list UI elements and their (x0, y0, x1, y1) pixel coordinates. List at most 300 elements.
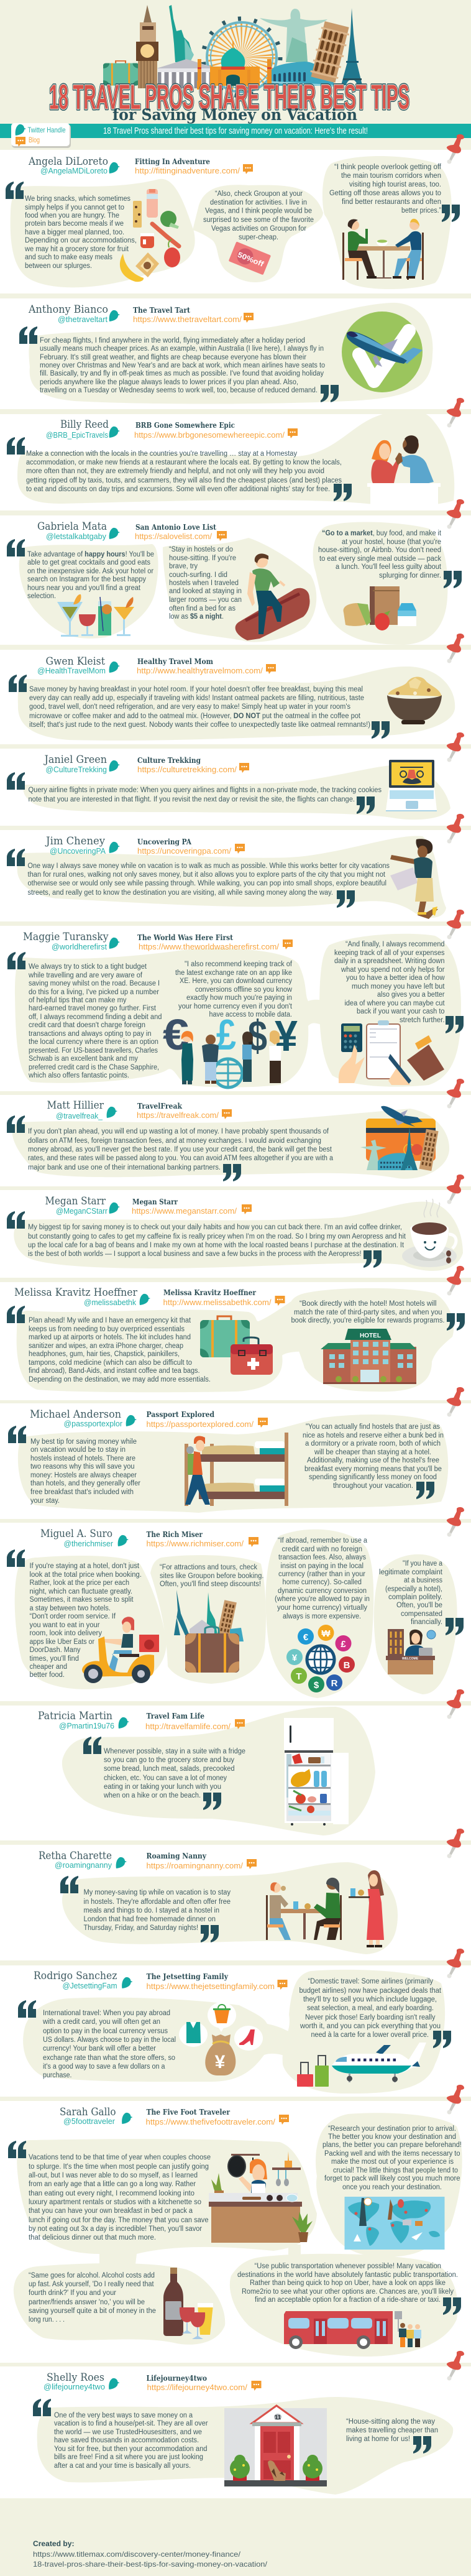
illustration: hotel receptionist: WELCOME (402, 1657, 419, 1661)
author name and handle (37, 655, 120, 675)
illustration: credit card and landmarks (360, 1106, 439, 1171)
illustration: currencies and travellers: € (163, 1010, 189, 1059)
speech blobs (17, 1288, 454, 1392)
quote text left: My best tip for saving money while (30, 1438, 137, 1446)
quote text right: “I think people overlook getting off (334, 164, 442, 171)
quote text column 3: currency (rather than in your (278, 1571, 365, 1578)
subtitle: for Saving Money on Vacation (112, 106, 357, 124)
quote text: travelling on a Tuesday or Wednesday seems to work well, too, because of reduced demand. (40, 387, 318, 394)
quote text column 3: (where you're allowed to pay in (275, 1595, 370, 1603)
author name and handle: Shelly Roes (47, 2371, 104, 2384)
illustration: currency bubbles around globe: € (303, 1632, 309, 1643)
quote text left: two reasons why this will save you (30, 1463, 134, 1470)
quote text main: than eating out every night, I recommend looking into (29, 2190, 194, 2197)
pin (447, 1829, 464, 1858)
quote text: fill. Basically, try and fly in off-peak times as much as possible. I've found that avoiding holiday (40, 370, 324, 377)
quote text left: option to pay in the local currency versus (43, 2028, 168, 2035)
quote text column 4: legitimate complaint (379, 1569, 443, 1576)
author name and handle (34, 1970, 133, 1990)
quote text left: your stay. (30, 1497, 60, 1505)
pin (447, 1387, 464, 1416)
icon: open quote (19, 326, 37, 344)
author name and handle: Gwen Kleist (46, 655, 105, 668)
author name and handle (60, 2106, 133, 2126)
icon: close quote (446, 1618, 464, 1635)
blog title and url (147, 1530, 258, 1548)
icon: open quote (60, 1876, 78, 1893)
icon: open quote (7, 849, 25, 866)
illustration: coupon (229, 241, 271, 275)
illustration: hotel receptionist (386, 1629, 436, 1674)
quote text: up the local cafe for a bag of beans and I make my own at home with the local roasted beans I purchase at the destination. It (28, 1242, 405, 1249)
quote text: Save money by having breakfast in your hotel room. If your hotel doesn't offer free breakfast, buying this meal (29, 686, 363, 693)
quote text top right: Packing well and with the items necessary to (324, 2150, 460, 2158)
icon: open quote (8, 1426, 26, 1443)
quote text column 2 (160, 1564, 263, 1588)
icon: close quote (337, 890, 355, 908)
panel: Melissa Kravitz Hoeffner (7, 1286, 465, 1416)
pin (447, 1266, 464, 1296)
quote text left: hours near you and you'll find a great (27, 584, 141, 592)
quote text left: between our splurges. (25, 262, 92, 270)
speech blob (18, 1415, 448, 1513)
quote text left: credit card that doesn't charge foreign (29, 1022, 145, 1029)
quote text left: We always try to stick to a tight budget (29, 963, 147, 971)
quote text left (29, 1317, 211, 1383)
blog title and url: https://uncoveringpa.com/ (137, 846, 231, 856)
quote text column 1: you want to eat in your (30, 1622, 100, 1629)
quote text middle: exactly how much you're paying in (186, 994, 292, 1002)
speech blob (17, 836, 446, 918)
illustration: snacks (120, 189, 180, 282)
illustration: cocktails (57, 594, 134, 637)
icon: close quote (321, 385, 339, 402)
quote text: is the best of both worlds — I support a local business and save a few bucks in the process with the Aeropress! (28, 1250, 362, 1258)
quote text column 4: complain politely. (388, 1594, 442, 1601)
quote text right: they'll try to sell you which include luggage, (303, 1996, 437, 2003)
quote text lower left: up fast. Ask yourself, 'Do I really need that (29, 2281, 154, 2288)
quote text middle (169, 546, 242, 621)
author name and handle: Jim Cheney (45, 835, 105, 847)
quote text column 4: (especially a hotel), (385, 1586, 442, 1593)
author name and handle: @melissabethk (84, 1298, 136, 1307)
quote text left: food when you are hungry. The (25, 212, 119, 219)
author name and handle (47, 1099, 117, 1120)
blog title and url (133, 306, 254, 324)
panel: Patricia Martin (38, 1707, 464, 1858)
icon: close quote (444, 571, 462, 588)
quote text: good, travel well, don't need refrigeration, and are very easy to make! Simply heat up water in your room's (29, 703, 350, 711)
quote text column 1: cheaper and (30, 1663, 67, 1671)
quote text right: “And finally, I always recommend (345, 941, 445, 948)
quote text column 4: Often, you'll be (396, 1602, 442, 1609)
quote text lower right: Rome2rio to see what your other options are. Chances are, you'll likely (242, 2288, 454, 2296)
author name and handle: @AngelaMDiLoreto (40, 166, 107, 175)
quote text middle: have access to mobile data. (209, 1011, 292, 1018)
blog title and url: TravelFreak (137, 1102, 183, 1110)
speech blobs (23, 1970, 445, 2094)
quote text lower right: Rather than being quick to hop on Uber, have a look on apps like (250, 2279, 446, 2287)
author name and handle (28, 155, 120, 175)
quote text right: house-sitting), or Airbnb. You don't need (318, 547, 441, 554)
quote text right: “Book directly with the hotel! Most hotels will (300, 1300, 436, 1308)
panel: Gwen Kleist (9, 655, 464, 762)
quote text: Query airline flights in private mode: When you query airlines and flights in a non-private mode, the tracking cookies (29, 787, 382, 794)
quote text left: free breakfast that's included with (30, 1489, 134, 1496)
quote text left: find abroad), Band-Aids, and instant coffee and tea bags. (29, 1367, 200, 1375)
quote text left: marked up at airports or hotels. The kit includes hand (29, 1334, 191, 1341)
quote text left: exchange rate than what the store offers, so (43, 2054, 175, 2062)
blog title and url (137, 838, 245, 856)
page background (0, 0, 471, 150)
author name and handle: Megan Starr (45, 1195, 106, 1207)
quote text lower right: “Use public transportation whenever possible! Many vacation (255, 2263, 441, 2270)
blog title and url: Lifejourney4two (147, 2374, 207, 2383)
quote text right (300, 1978, 442, 2039)
quote text middle: and looked at staying in (169, 588, 242, 595)
quote text: periods anywhere like the plague always leads to lower prices if you plan ahead. Also, (40, 379, 298, 386)
panel: Jim Cheney (7, 835, 464, 939)
quote text column 4 (379, 1560, 443, 1626)
quote text left (42, 2010, 176, 2079)
quote text left: preferred credit card is the Chase Sapphire, (29, 1064, 159, 1071)
quote text lower right: destinations in the world have absolutely fantastic public transportation. (237, 2271, 458, 2279)
author name and handle (46, 418, 120, 440)
speech blob (12, 1109, 449, 1179)
blog title and url: Melissa Kravitz Hoeffner (163, 1288, 257, 1297)
quote text column 1: “Don't order room service. If (30, 1613, 116, 1620)
speech blobs (15, 1530, 457, 1698)
blog title and url: https://culturetrekking.com/ (137, 765, 237, 774)
author name and handle: @HealthTravelMom (37, 666, 106, 675)
author name and handle: Retha Charette (39, 1850, 112, 1862)
blog title and url: Fitting In Adventure (135, 157, 210, 166)
pin (447, 1689, 464, 1719)
author name and handle: @CultureTrekking (46, 765, 107, 774)
icon: close quote (203, 1793, 221, 1810)
quote text left: of helpful tips that can make my (29, 997, 127, 1004)
blog title and url: https://www.theworldwasherefirst.com/ (139, 942, 279, 951)
quote text left: Depending on our accommodations, (25, 237, 137, 244)
quote text right: worth it, and you can pick everything that you (300, 2023, 441, 2030)
blog title and url: https://salovelist.com/ (135, 532, 212, 541)
quote text column 1: DoorDash. Many (30, 1646, 81, 1654)
author name and handle (37, 520, 120, 541)
quote text right: living at home for us! (346, 2435, 410, 2443)
blog title and url: https://travelfreak.com/ (137, 1110, 219, 1120)
blog title and url: Passport Explored (147, 1410, 215, 1419)
icon: close quote (357, 796, 375, 814)
quote text: chicken, etc. You can save a lot of money (104, 1775, 227, 1782)
quote text right (318, 530, 442, 579)
quote text column 3: transaction fees. Also, always (278, 1554, 366, 1561)
illustration: currencies and travellers: ¥ (275, 1012, 298, 1060)
quote text middle: super-cheap. (239, 234, 278, 241)
quote text left: currency! Your bank will offer a better (43, 2045, 156, 2052)
blog title and url: Culture Trekking (137, 756, 201, 765)
quote text left: selection. (27, 593, 56, 600)
illustration: walker with map (390, 839, 438, 919)
quote text middle: larger rooms — you can (169, 596, 242, 604)
quote text: My biggest tip for saving money is to check out your daily habits and how you can cut back there. I'm an avid coffee drinker, (28, 1224, 402, 1231)
quote text main (29, 2154, 211, 2241)
illustration: money bag with shopping bubbles (179, 2002, 263, 2075)
quote text left: saving money whilst on the road. Because I (29, 980, 160, 987)
quote text column 4: "If you have a (403, 1560, 443, 1567)
blog title and url (147, 2374, 261, 2392)
illustration: packed lunch (344, 586, 416, 630)
quote text: dollars on ATM fees, foreign transaction fees, and at money exchanges. I would avoid exchanging (28, 1137, 321, 1145)
author name and handle (14, 1286, 150, 1307)
author name and handle: Miguel A. Suro (40, 1528, 112, 1540)
quote text right: Never pick those! Early boarding isn't really (305, 2014, 436, 2021)
quote text left: tampons, cold medicine (which can also be difficult to (29, 1359, 192, 1367)
quote text (40, 337, 325, 394)
quote text right: seat selection, a meal, and early boarding. (307, 2005, 434, 2012)
quote text left: We bring snacks, which sometimes (25, 195, 130, 203)
author name and handle: Matt Hillier (47, 1099, 104, 1112)
illustration: world map (344, 2197, 445, 2250)
quote text main: Vacations tend to be that time of year when couples choose (29, 2154, 211, 2161)
icon: close quote (223, 1164, 241, 1181)
quote text column 3: “If abroad, remember to use a (278, 1537, 368, 1544)
blog title and url (145, 2108, 289, 2126)
quote text left: which also offers fantastic points. (28, 1072, 129, 1079)
pin (447, 634, 464, 663)
quote text right: better prices.” (401, 207, 441, 215)
quote text middle: your home currency even if you don't (178, 1003, 293, 1010)
quote text left: we may hit a grocery store for fruit (24, 246, 129, 253)
quote text left: the local currency where there is an option (29, 1038, 158, 1046)
blog title and url: https://roamingnanny.com/ (147, 1861, 243, 1870)
illustration: bunk bed and hiker (185, 1433, 288, 1506)
quote text right: to eat every single meal outside — pack (319, 555, 441, 563)
panel: Gabriela Mata (7, 520, 464, 663)
blog title and url (134, 421, 298, 440)
quote text lower right (237, 2263, 458, 2304)
illustration: currency bubbles around globe: $ (314, 1680, 319, 1691)
quote text column 1: better food. (30, 1671, 65, 1679)
illustration: couple dining (342, 219, 424, 280)
illustration: currency bubbles around globe: ¥ (292, 1653, 298, 1663)
quote text top right: “Research your destination prior to arrival. (328, 2125, 456, 2133)
blog title and url (163, 1288, 285, 1307)
quote text right: stretch further. (400, 1017, 445, 1024)
quote text: accommodation, or make new friends at a restaurant where the locals eat. By getting to know the locals, (26, 459, 342, 466)
quote text main: from an early age that a little can go a long way. Rather (29, 2181, 196, 2188)
panel: Billy Reed (7, 409, 464, 529)
blog title and url: Roaming Nanny (147, 1852, 207, 1860)
quote text left: on vacation would be to stay in (30, 1446, 126, 1454)
panel: Megan Starr (7, 1195, 464, 1296)
author name and handle: @MeganCStarr (56, 1206, 108, 1216)
pin (447, 910, 464, 939)
illustration: house door with dog: 11 (275, 2414, 281, 2421)
quote text (28, 1128, 334, 1171)
quote text left: vacation is to find a house/pet-sit. They are all over (54, 2420, 208, 2427)
quote text left: simply helps if you cannot get to (25, 204, 124, 211)
quote text right: breakfast every morning means that you'll be (304, 1466, 442, 1473)
author name and handle (23, 931, 120, 951)
quote text left: than hotels, and they generally offer (30, 1480, 140, 1487)
quote text: some bread, lunch meat, salads, precooked (104, 1765, 235, 1773)
quote text left: money: Hostels are always cheaper (30, 1472, 137, 1479)
author name and handle: @JetsettingFam (62, 1981, 117, 1990)
quote text right: need à la carte for a lower overall price. (311, 2031, 429, 2039)
quote text right: throughout your vacation. (333, 1482, 413, 1490)
quote text lower right: find an acceptable option for a fraction of a ride-share or taxi. (255, 2296, 441, 2304)
panel: Michael Anderson (8, 1408, 464, 1537)
illustration: currency bubbles around globe (286, 1625, 355, 1692)
quote text: to eat and discounts on day trips and excursions. Some will even offer additional nights' stay for free. (26, 486, 330, 493)
quote text main: luxury apartment rentals or studios with a kitchenette so (29, 2199, 201, 2206)
quote text middle: house-sitting. If you're (169, 555, 236, 562)
quote text middle: surprised to see some of the favorite (203, 216, 314, 224)
quote text: eating in or taking your lunch with you (104, 1783, 221, 1791)
author name and handle (30, 1408, 137, 1428)
author name and handle (38, 1710, 129, 1730)
icon: open quote (18, 2000, 36, 2018)
quote text middle: “Stay in hostels or do (169, 546, 233, 553)
quote text: If you don't plan ahead, you will end up wasting a lot of money. I have probably spent thousands of (28, 1128, 329, 1135)
quote text column 3: your home currency) virtually (277, 1604, 367, 1612)
quote text right: “Go to a market, buy food, and make it (322, 530, 442, 537)
icon: close quote (447, 1313, 465, 1331)
quote text top right: once you reach your destination. (342, 2184, 442, 2191)
speech blobs (14, 2113, 462, 2357)
quote text right: much money you have left but (352, 983, 445, 990)
quote text: more often than not, they are extremely friendly and helpful, and not only will they help you avoid (26, 468, 324, 475)
speech blob (17, 409, 454, 506)
quote text middle: Vegas, and I think people would be (205, 208, 312, 215)
illustration: plane over green check (342, 312, 423, 392)
quote text: otherwise see or would only see while passing through. While walking, you can pop into small shops, explore beautiful (27, 880, 386, 887)
author name and handle: @thetraveltart (58, 315, 107, 324)
quote text lower left: saving yourself quite a bit of money in the (29, 2307, 156, 2315)
quote text lower left (29, 2272, 156, 2324)
illustration: two people at counter (367, 435, 441, 506)
quote text right: a lunch. You'll feel less guilty about (336, 563, 442, 571)
footer credits: 18-travel-pros-share-their-best-tips-for-saving-money-on-vacation/ (33, 2560, 268, 2569)
quote text: itself; that's just rude to the next guest. Nobody wants their coffee to unexpectedly taste like oatmeal remnants!) (29, 721, 370, 729)
author name and handle (28, 303, 120, 324)
icon: open quote (7, 1115, 25, 1133)
blog title and url (137, 657, 276, 675)
quote text middle: brave, try (169, 563, 198, 570)
illustration: plane and luggage (297, 2043, 426, 2087)
blog title and url (135, 523, 227, 541)
author name and handle: Patricia Martin (38, 1710, 112, 1722)
quote text right: “Domestic travel: Some airlines (primarily (308, 1978, 433, 1985)
blog title and url: Healthy Travel Mom (137, 657, 213, 666)
pin (447, 814, 464, 843)
pin (447, 398, 464, 428)
quote text left: US dollars. Always choose to pay in the local (43, 2036, 176, 2044)
quote text right (334, 941, 445, 1024)
footer credits: Created by: (33, 2539, 75, 2548)
blog title and url: Uncovering PA (137, 838, 192, 846)
illustration: currencies and travellers: $ (248, 1012, 267, 1060)
blog title and url: The World Was Here First (137, 933, 233, 942)
speech blob (23, 765, 450, 819)
quote text left: with a credit card, you will often get an (42, 2018, 160, 2026)
author name and handle (39, 1850, 127, 1870)
quote text middle: Vegas activities on Groupon for (211, 225, 306, 233)
quote text: note that you are interested in that flight. If you revisit the next day or revisit the site, the flights can change. (29, 796, 355, 803)
quote text lower left: partner/friends answer 'no,' you will be (29, 2299, 145, 2306)
blog title and url (145, 1712, 245, 1731)
blog title and url: San Antonio Love List (135, 523, 216, 532)
quote text column 3: dynamic currency conversion (278, 1587, 367, 1595)
icon: open quote (33, 2399, 51, 2416)
quote text middle (203, 190, 314, 241)
illustration: oatmeal bowl (387, 676, 442, 724)
blog title and url: https://www.thetraveltart.com/ (133, 315, 242, 324)
blog title and url: https://lifejourney4two.com/ (147, 2383, 247, 2392)
quote text left: One of the very best ways to save money on a (54, 2412, 193, 2419)
speech blob (18, 667, 455, 741)
blog title and url: The Jetsetting Family (147, 1972, 229, 1981)
author name and handle: Billy Reed (60, 418, 109, 431)
quote text left: do this for a living, I've picked up a number (29, 989, 159, 996)
pin (447, 732, 464, 762)
author name and handle (45, 1195, 120, 1216)
quote text main: lunch if going out for the day. The money that you can save (29, 2217, 209, 2224)
quote text left: it's a good way to save a few dollars on a (43, 2063, 165, 2070)
quote text: London that had free homemade dinner on (83, 1916, 216, 1923)
icon: open quote (8, 2141, 26, 2158)
quote text right: "You can actually find hostels that are just as (306, 1423, 440, 1431)
quote text (26, 450, 342, 493)
speech blobs (15, 934, 461, 1087)
quote text column 1: Sometimes, it makes sense to split (30, 1596, 134, 1604)
quote text: rates, and these rates will be passed along to you. You can avoid ATM fees altogether if you are with a (28, 1155, 334, 1162)
quote text: Thursday, Friday, and Saturday nights! (83, 1924, 198, 1932)
quote text middle: destination for activities. I live in (210, 199, 307, 206)
quote text: money over Christmas and New Year's and are back at work, which mean airlines have seats to (40, 362, 325, 369)
blog title and url (137, 1102, 232, 1120)
quote text column 2: sites like Groupon before booking. (160, 1572, 263, 1580)
author name and handle: @UncoveringPA (50, 846, 106, 856)
quote text left: Take advantage of happy hours! You'll be (27, 551, 154, 558)
quote text: every day can really add up, especially if traveling with kids! Instant oatmeal packets are filling, nutritious, taste (29, 695, 364, 702)
author name and handle: Gabriela Mata (37, 520, 107, 533)
quote text right: “House-sitting along the way (346, 2418, 435, 2426)
quote text main: that delicious dinner out that much more. (29, 2234, 156, 2241)
blog title and url: https://www.brbgonesomewhereepic.com/ (134, 430, 285, 440)
illustration: hotel: HOTEL (360, 1332, 381, 1339)
author name and handle (45, 835, 120, 856)
illustration: currency bubbles around globe: £ (341, 1639, 346, 1650)
quote text column 1: apps like Uber Eats or (30, 1638, 94, 1646)
quote text: money abroad, as you'll never get the best rate. If you use your credit card, the bank will get the best (28, 1146, 332, 1153)
quote text column 3: credit card with no foreign (282, 1546, 362, 1553)
illustration: currencies and travellers: £ (216, 1010, 236, 1059)
author name and handle: Michael Anderson (30, 1408, 121, 1421)
quote text: Whenever possible, stay in a suite with a fridge (104, 1748, 245, 1755)
quote text main: all-out, but I was never able to do so myself, as I learned (29, 2172, 198, 2179)
blog title and url: https://passportexplored.com/ (147, 1420, 254, 1429)
banner: 18 Travel Pros shared their best tips for saving money on vacation: Here's the result! (103, 126, 368, 136)
author name and handle: Maggie Turansky (23, 931, 109, 943)
blog title and url (137, 756, 249, 774)
icon: open quote (7, 1211, 25, 1229)
quote text column 1: If you're staying at a hotel, don't just (30, 1563, 140, 1570)
author name and handle: @5foottraveler (63, 2117, 116, 2126)
quote text: but constantly going to cafes to get my caffeine fix is really pricey when I'm on the road. So I bring my own Aeropress and hit (28, 1233, 406, 1240)
quote text: Make a connection with the locals in the countries you're travelling … stay at a Homestay (26, 450, 297, 458)
panel: Rodrigo Sanchez (18, 1970, 464, 2114)
